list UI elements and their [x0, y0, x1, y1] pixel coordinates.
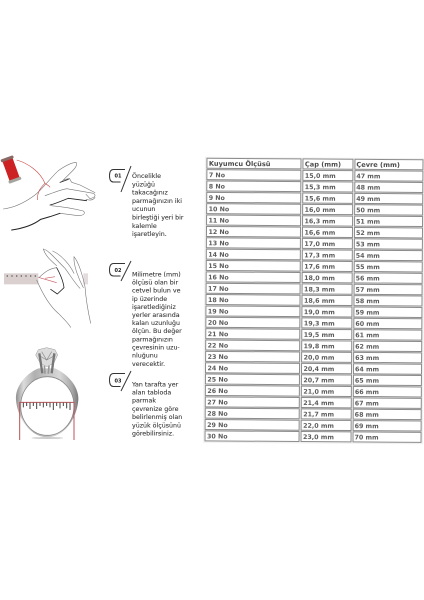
step 1 text: yüzüğü: [132, 180, 155, 188]
step 3 text: Yan tarafta yer: [131, 381, 179, 388]
row 21 No: 61 mm: [355, 332, 380, 339]
row 25 No: 25 No: [207, 377, 229, 384]
row 17 No: 17 No: [208, 286, 229, 293]
row 15 No: 55 mm: [356, 264, 380, 271]
step 2 text: çevresinin uzu-: [132, 344, 180, 351]
row 22 No: 62 mm: [355, 344, 380, 351]
step 3 text: görebilirsiniz.: [132, 430, 174, 438]
row 8 No: 15,3 mm: [305, 184, 336, 191]
step 2 text: cetvel bulun ve: [132, 288, 181, 295]
row 28 No: 28 No: [207, 411, 228, 418]
row 16 No: 18,0 mm: [304, 275, 335, 282]
row 30 No: [205, 431, 421, 442]
row 21 No: 21 No: [208, 331, 229, 338]
row 17 No: 18,3 mm: [304, 286, 335, 294]
row 27 No: 67 mm: [355, 400, 379, 408]
table header: Çap (mm): [305, 160, 341, 169]
step 1 text: kalemle: [132, 223, 157, 230]
step 2 text: kalan uzunluğu: [132, 319, 180, 327]
row 8 No: 8 No: [209, 183, 226, 191]
ring band: [16, 368, 78, 437]
step 2 text: parmağınızın: [132, 335, 173, 343]
step 1 text: Öncelikle: [132, 171, 161, 180]
row 9 No: 49 mm: [356, 196, 381, 203]
step 3 text: çevrenize göre: [132, 406, 179, 413]
row 13 No: 53 mm: [356, 241, 380, 248]
step 3 text: belirlenmiş olan: [132, 414, 182, 421]
row 23 No: [206, 351, 422, 363]
row 29 No: 22,0 mm: [303, 423, 334, 430]
step 3 text: parmak: [132, 398, 156, 405]
row 17 No: 57 mm: [356, 287, 380, 294]
row 21 No: 19,5 mm: [304, 332, 335, 339]
row 12 No: 52 mm: [356, 230, 381, 237]
step 2 text: nluğunu: [132, 352, 158, 360]
row 8 No: [207, 181, 423, 192]
row 7 No: [207, 170, 423, 181]
row 14 No: [206, 249, 422, 261]
row 26 No: 26 No: [207, 388, 229, 395]
row 25 No: 20,7 mm: [303, 377, 335, 384]
row 18 No: 18,6 mm: [304, 298, 335, 305]
measure lines: [20, 402, 74, 440]
row 12 No: [206, 226, 423, 238]
row 9 No: 9 No: [209, 195, 226, 202]
badge 01: 01: [114, 174, 122, 180]
row 30 No: 70 mm: [355, 434, 379, 442]
step 1 text: işaretleyin.: [132, 231, 167, 238]
row 23 No: 63 mm: [355, 355, 380, 362]
illustration: fingers holding ruler: [4, 249, 91, 327]
row 19 No: 19 No: [208, 308, 229, 316]
row 30 No: 23,0 mm: [303, 434, 334, 441]
row 28 No: 68 mm: [355, 412, 379, 419]
row 23 No: 20,0 mm: [304, 355, 335, 362]
step 2 text: yerler arasında: [132, 312, 180, 319]
row 8 No: 48 mm: [356, 184, 381, 192]
row 27 No: 21,4 mm: [303, 400, 335, 407]
row 29 No: 29 No: [207, 422, 228, 429]
step 3 text: alan tabloda: [132, 390, 171, 396]
step 2 text: işaretlediğiniz: [132, 303, 177, 311]
step 3 text: yüzük ölçüsünü: [132, 422, 181, 429]
row 19 No: 59 mm: [355, 309, 380, 317]
row 7 No: 7 No: [209, 172, 226, 179]
row 26 No: 21,0 mm: [303, 389, 335, 396]
row 22 No: 22 No: [208, 343, 229, 350]
row 24 No: 64 mm: [355, 366, 380, 373]
row 11 No: [207, 215, 423, 227]
row 9 No: [207, 192, 423, 204]
row 19 No: [206, 306, 422, 317]
table header: Kuyumcu Ölçüsü: [209, 159, 271, 168]
row 16 No: 56 mm: [356, 275, 380, 283]
row 13 No: 17,0 mm: [304, 241, 336, 248]
row 28 No: [205, 408, 421, 420]
row 18 No: 58 mm: [355, 298, 380, 305]
row 25 No: [205, 374, 421, 386]
row 20 No: 19,3 mm: [304, 320, 335, 328]
illustration: hand with thread and spool: [0, 155, 95, 230]
step 2 text: Milimetre (mm): [132, 272, 181, 278]
row 24 No: 20,4 mm: [303, 366, 335, 373]
row 10 No: 10 No: [209, 206, 230, 213]
row 22 No: [206, 340, 422, 352]
row 11 No: 11 No: [209, 218, 230, 225]
row 14 No: 54 mm: [356, 253, 380, 260]
row 20 No: 60 mm: [355, 321, 380, 328]
step 1 text: birleştiği yeri bir: [132, 214, 184, 222]
row 28 No: 21,7 mm: [303, 411, 335, 419]
row 13 No: [206, 238, 422, 249]
row 29 No: 69 mm: [355, 423, 379, 430]
row 9 No: 15,6 mm: [305, 196, 336, 203]
step 1 text: takacağınız: [132, 189, 169, 197]
row 24 No: 24 No: [207, 365, 229, 372]
badge 02: [110, 261, 131, 281]
row 10 No: 50 mm: [356, 207, 381, 214]
row 26 No: [205, 385, 421, 397]
row 12 No: 16,6 mm: [304, 230, 336, 237]
row 21 No: [206, 329, 422, 340]
step 2 text: ölçün. Bu değer: [132, 327, 182, 335]
row 24 No: [205, 363, 422, 374]
row 13 No: 13 No: [208, 240, 230, 247]
row 11 No: 16,3 mm: [305, 218, 336, 225]
illustration: ring with measure: [16, 348, 78, 440]
row 14 No: 14 No: [208, 252, 230, 259]
row 7 No: 15,0 mm: [305, 173, 336, 180]
row 16 No: 16 No: [208, 274, 229, 282]
row 18 No: [206, 295, 422, 306]
row 15 No: 15 No: [208, 263, 229, 270]
row 30 No: 30 No: [207, 433, 228, 441]
row 20 No: [206, 317, 422, 329]
row 16 No: [206, 272, 422, 283]
row 18 No: 18 No: [208, 297, 229, 304]
badge 01: [110, 166, 131, 192]
table header: Çevre (mm): [356, 161, 400, 169]
row 7 No: 47 mm: [356, 173, 381, 180]
step 2 text: verecektir.: [132, 361, 165, 368]
row 10 No: [207, 204, 423, 215]
step 1 text: ucunun: [132, 206, 155, 213]
step 2 text: ip üzerinde: [132, 296, 167, 303]
table header: [207, 158, 423, 170]
row 19 No: 19,0 mm: [304, 309, 335, 316]
badge 03: [110, 371, 131, 391]
step 2 text: ölçüsü olan bir: [132, 280, 179, 287]
row 27 No: [205, 397, 421, 408]
row 23 No: 23 No: [208, 354, 229, 361]
row 26 No: 66 mm: [355, 389, 379, 396]
row 29 No: [205, 420, 421, 431]
diamond: [36, 348, 58, 374]
row 11 No: 51 mm: [356, 219, 381, 226]
row 22 No: 19,8 mm: [304, 343, 335, 350]
row 15 No: 17,6 mm: [304, 264, 336, 271]
badge 03: 03: [114, 378, 122, 384]
row 15 No: [206, 260, 422, 272]
badge 02: 02: [114, 268, 122, 274]
row 12 No: 12 No: [208, 229, 230, 236]
size table: [203, 157, 424, 444]
row 20 No: 20 No: [208, 320, 229, 327]
row 10 No: 16,0 mm: [305, 207, 336, 214]
row 14 No: 17,3 mm: [304, 252, 336, 260]
row 25 No: 65 mm: [355, 378, 379, 385]
row 27 No: 27 No: [207, 399, 229, 407]
ruler: [4, 273, 88, 284]
step 1 text: parmağınızın iki: [132, 197, 182, 205]
row 17 No: [206, 283, 422, 295]
icon: thread spool: [0, 155, 22, 184]
